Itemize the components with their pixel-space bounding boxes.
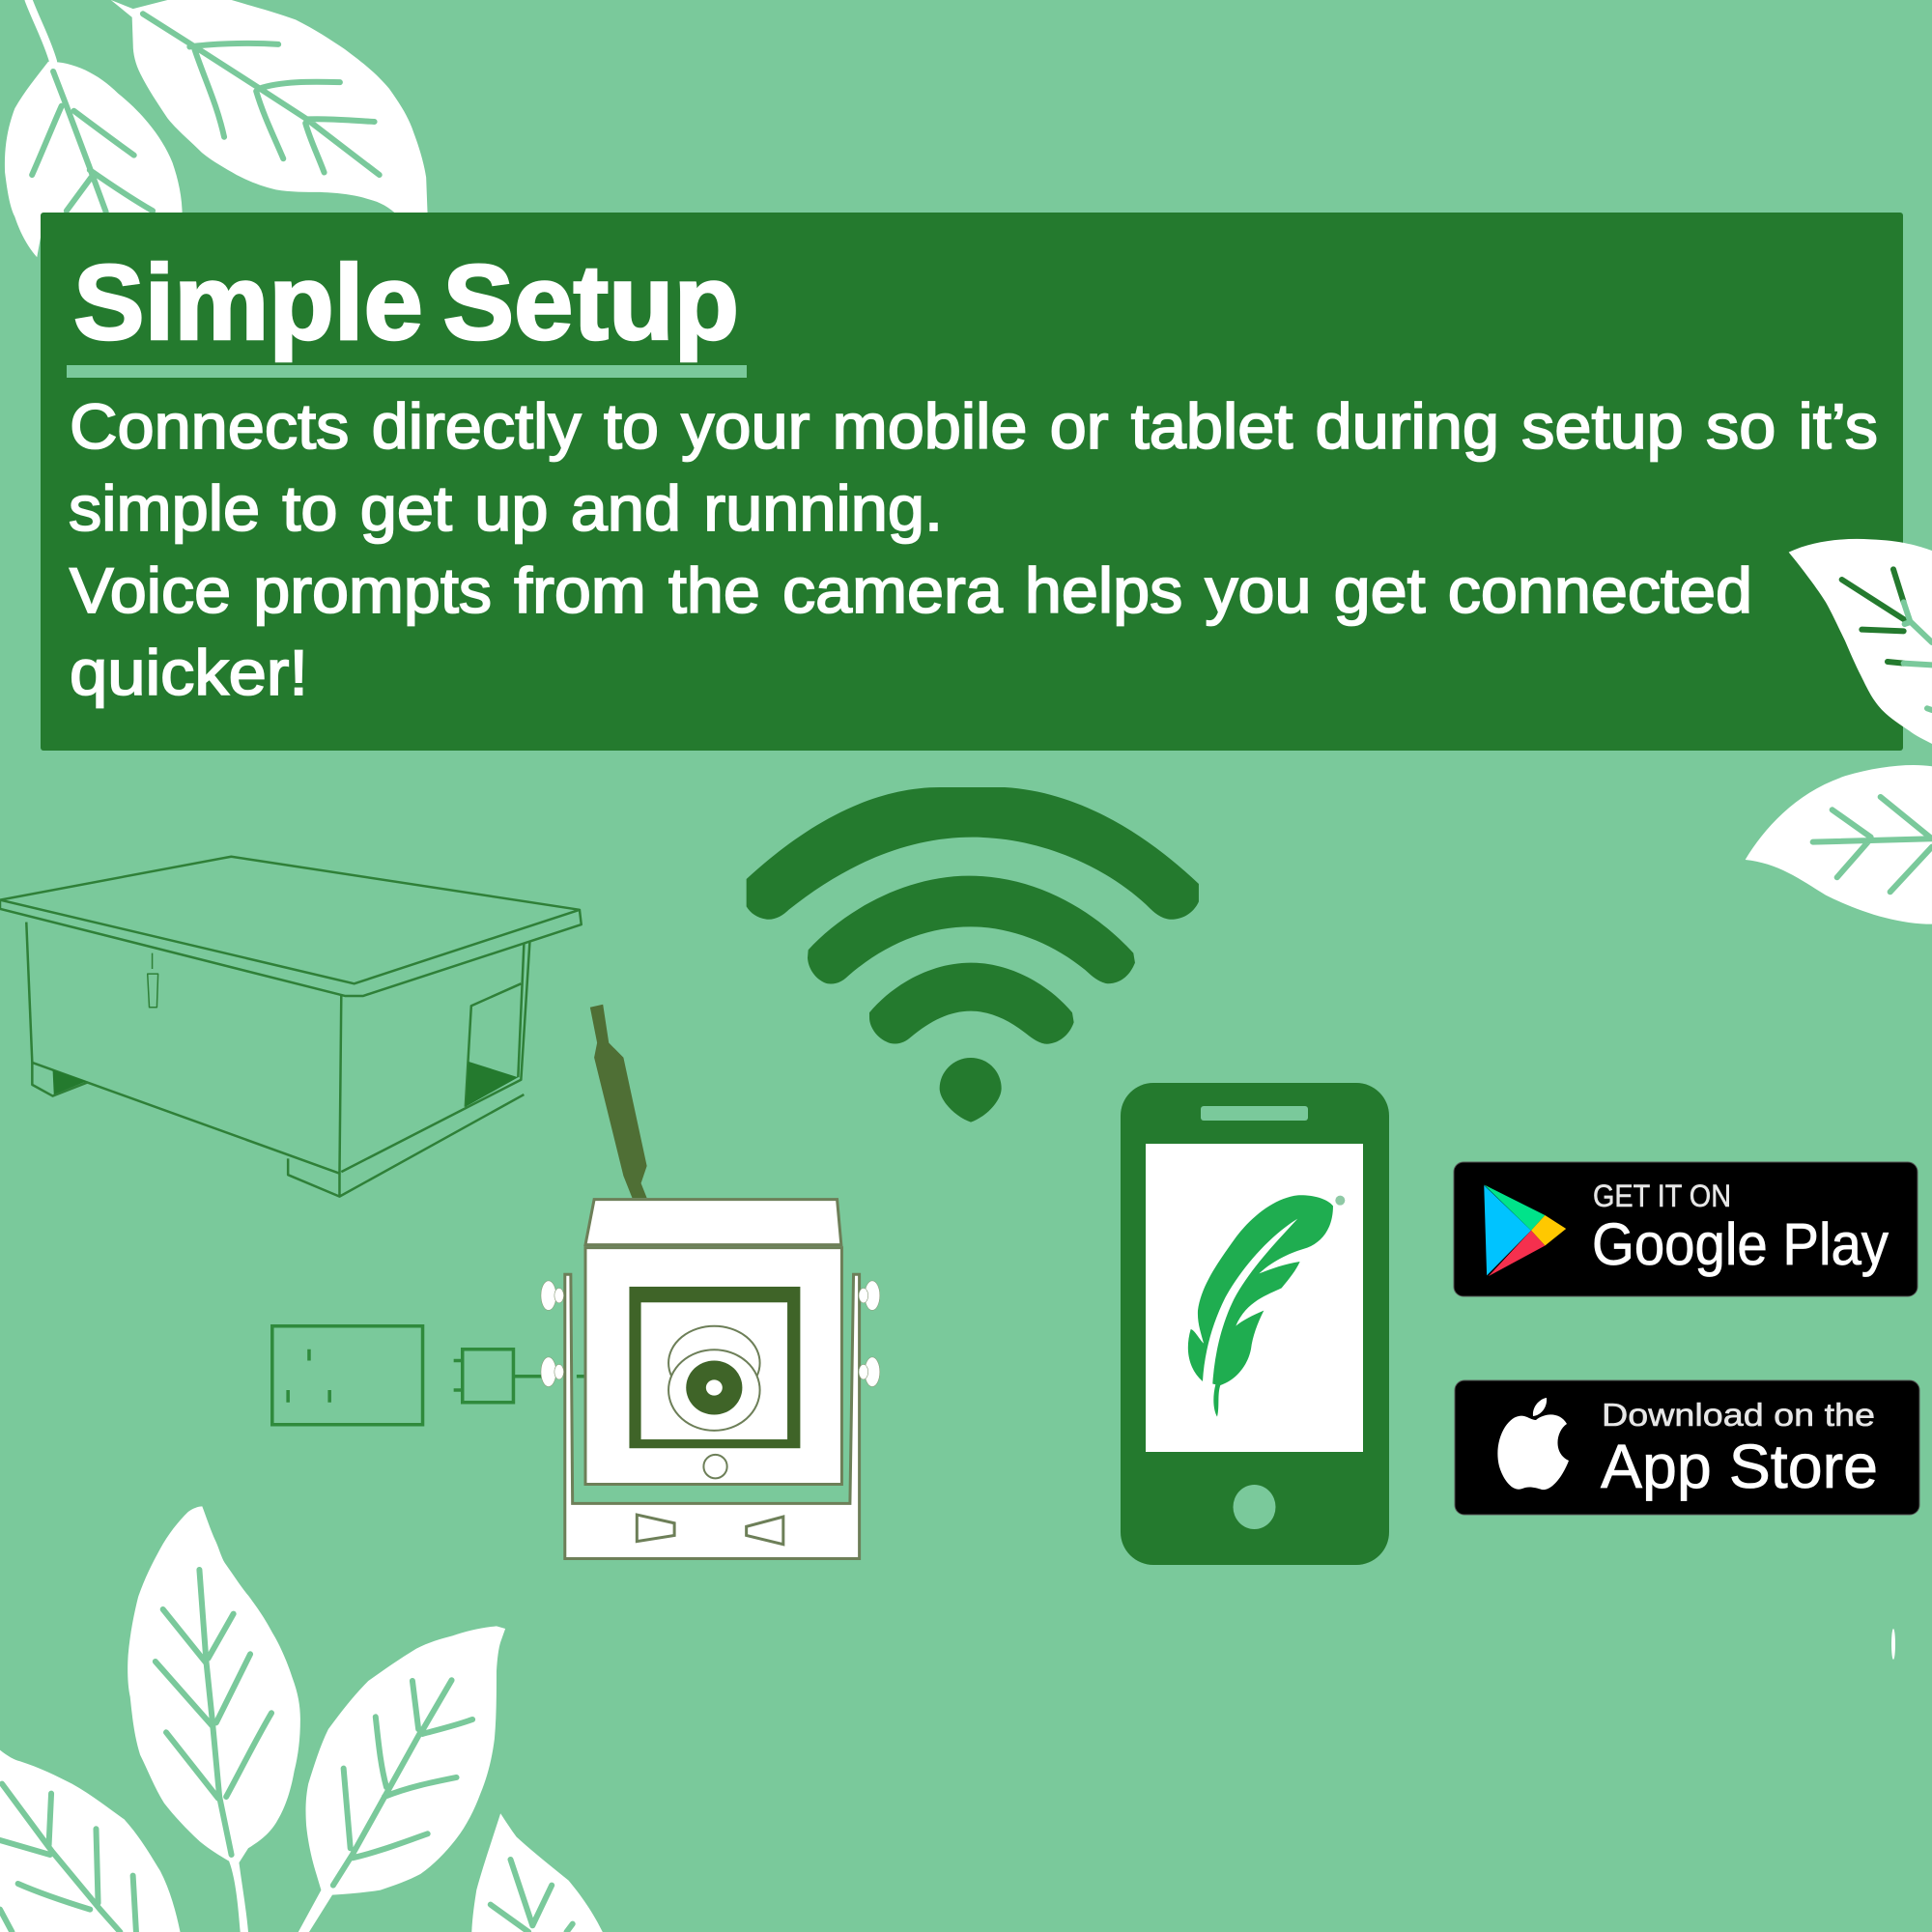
power socket and plug [272,1326,584,1425]
leaf: bottom small [471,1813,603,1932]
camera lens [668,1326,760,1431]
feather logo [1188,1195,1345,1417]
body text [69,390,1878,708]
google play badge [1454,1162,1918,1296]
leaf: right lower [1746,765,1932,924]
app store badge: App Store [1601,1432,1878,1501]
body text: simple to get up and running. [69,472,943,544]
leaf: top left small [5,0,183,257]
google play badge: Google Play [1592,1211,1889,1277]
camera body [585,1248,841,1484]
decorative leaves: right [1746,539,1932,924]
info panel [41,213,1903,751]
badge text: Download on the [1602,1397,1875,1433]
camera indicator [703,1455,727,1478]
leaf: top left large [111,0,428,216]
decorative leaves: bottom left [0,1506,603,1932]
wifi icon [747,787,1199,1122]
leaf: right upper [1789,539,1932,744]
camera antenna [590,1005,647,1198]
heading underline [67,365,747,378]
camera lens frame [629,1287,800,1448]
badge text: GET IT ON [1593,1179,1731,1213]
camera bracket and base [565,1274,860,1558]
decorative leaves: top left [5,0,428,257]
leaf: bottom centre right [298,1626,505,1932]
leaf: bottom far left [0,1750,181,1932]
app store badge [1455,1380,1919,1515]
decorative sliver [1891,1629,1895,1660]
apple icon [1497,1398,1569,1490]
body text: quicker! [70,637,308,708]
leaf: bottom centre [128,1506,300,1932]
play icon [1484,1184,1566,1276]
body text: Voice prompts from the camera helps you get connected [70,554,1752,626]
camera top housing [585,1200,841,1245]
heading: Simple Setup: Simple Setup [73,243,739,362]
camera mounting bolts [541,1281,880,1386]
phone icon [1121,1083,1389,1565]
hedgehog house box outline [0,857,582,1197]
panel background [41,213,1903,751]
body text: Connects directly to your mobile or tablet during setup so it’s [70,390,1878,462]
camera [541,1005,880,1558]
